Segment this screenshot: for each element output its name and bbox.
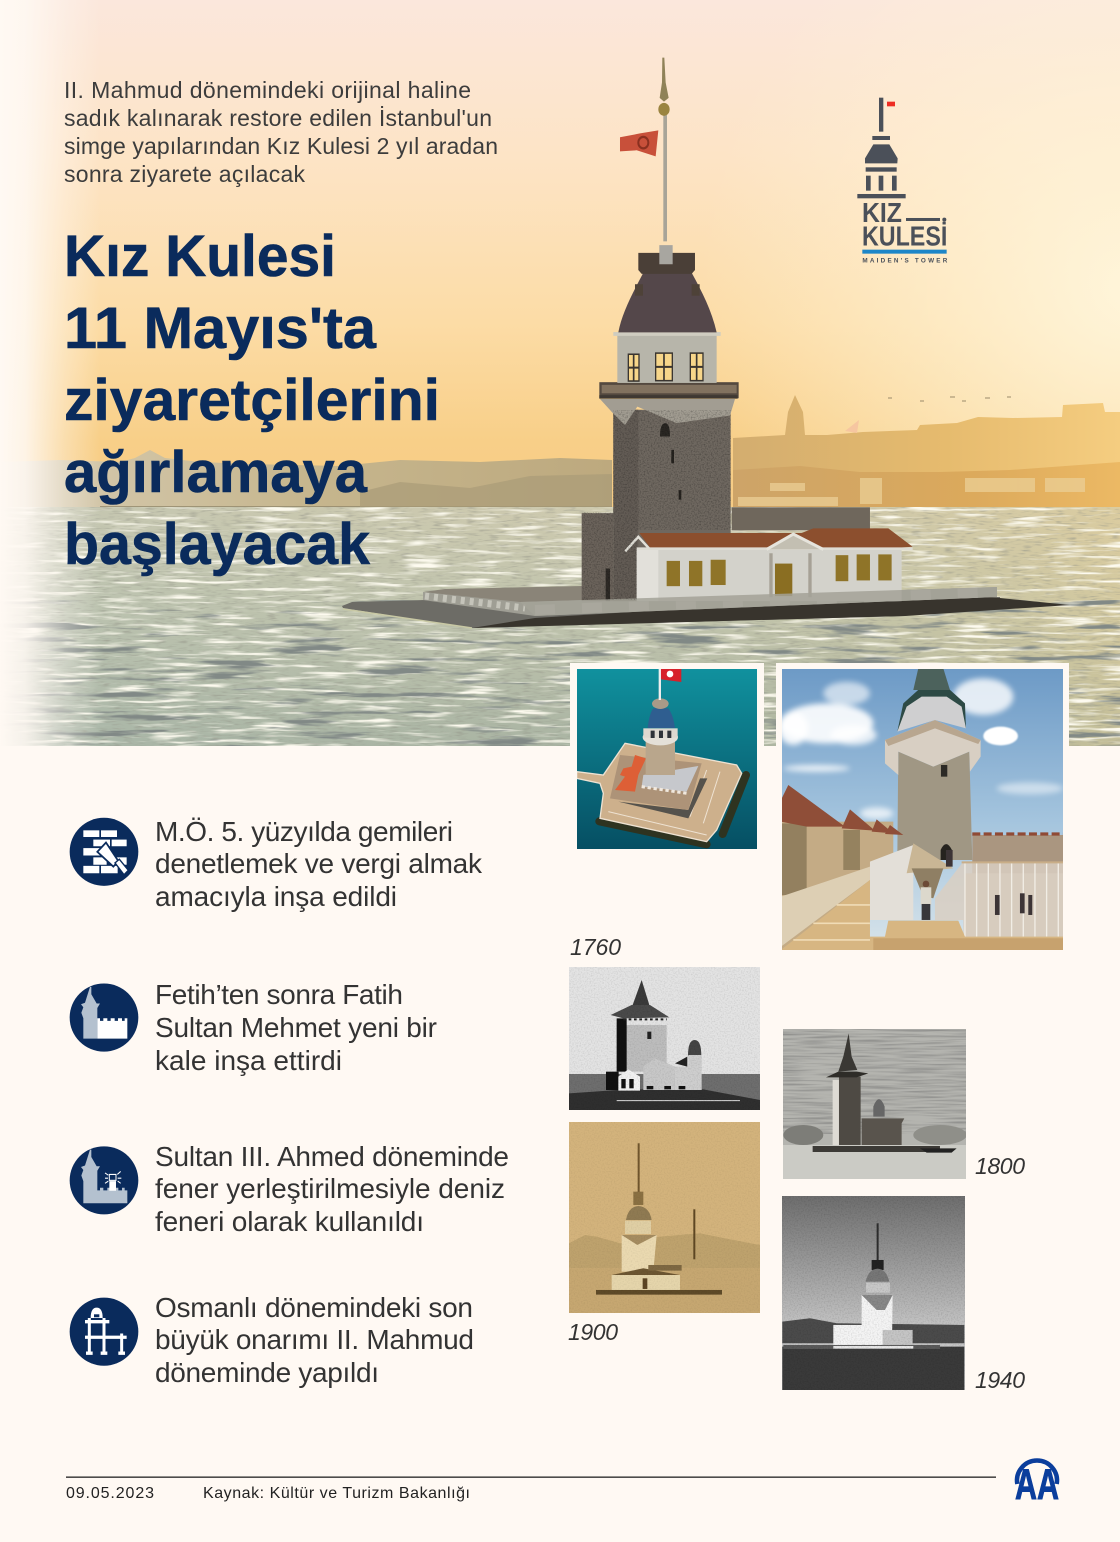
fact 3 text: feneri olarak kullanıldı bbox=[155, 1206, 424, 1237]
people in courtyard bbox=[946, 850, 1032, 915]
inner back wall bbox=[424, 586, 582, 602]
far shore right with Galata Tower bbox=[733, 395, 1120, 508]
raised perimeter bbox=[423, 587, 997, 616]
photo 1800 engraving bbox=[783, 1029, 967, 1180]
island deck bbox=[577, 743, 742, 842]
year labels: 1760 bbox=[570, 934, 621, 960]
title: Kız Kulesi bbox=[64, 224, 336, 289]
sea and ground bbox=[569, 1074, 760, 1111]
logo: Anadolu Agency: AA bbox=[1015, 1461, 1059, 1509]
fact 4 text: büyük onarımı II. Mahmud bbox=[155, 1324, 474, 1355]
shore and sea bbox=[783, 1125, 967, 1180]
logo tower mark bbox=[857, 98, 906, 198]
visitor bbox=[921, 881, 931, 920]
low building bbox=[625, 534, 913, 601]
flag bbox=[661, 668, 681, 682]
intro text bbox=[64, 77, 498, 187]
logo wordmark: MAIDEN'S TOWER bbox=[862, 258, 948, 265]
dome bbox=[618, 273, 717, 332]
logo: Kız Kulesi Maiden's Tower bbox=[857, 98, 948, 265]
logo wordmark: KIZ bbox=[862, 197, 902, 228]
title bbox=[64, 224, 440, 577]
front perimeter blocks over building base bbox=[520, 587, 997, 616]
low wings bbox=[606, 1040, 702, 1091]
photo: aerial view of the island bbox=[577, 668, 757, 849]
gallery and pole bbox=[635, 58, 700, 296]
water bbox=[569, 1268, 761, 1314]
fact 1 bbox=[70, 816, 483, 912]
fact 3 text bbox=[155, 1141, 509, 1237]
tower bbox=[826, 1033, 868, 1145]
sea bbox=[0, 507, 1120, 747]
photo: rendering of the restored tower terrace bbox=[778, 668, 1064, 951]
photo 1940 black and white bbox=[782, 1196, 965, 1392]
footer bbox=[66, 1461, 1059, 1509]
intro text: sonra ziyarete açılacak bbox=[64, 161, 306, 187]
intro text: sadık kalınarak restore edilen İstanbul'un bbox=[64, 105, 492, 131]
balcony bbox=[599, 382, 739, 399]
fact 3 text: Sultan III. Ahmed döneminde bbox=[155, 1141, 509, 1172]
fact 2 bbox=[70, 979, 437, 1076]
fact 1 text: M.Ö. 5. yüzyılda gemileri bbox=[155, 816, 453, 847]
title: 11 Mayıs'ta bbox=[64, 296, 377, 361]
icon: tower and fortress wall bbox=[70, 984, 138, 1052]
title: ziyaretçilerini bbox=[64, 368, 440, 433]
stair and railing bbox=[870, 843, 1063, 937]
fort wall and island bbox=[783, 1325, 940, 1349]
title: başlayacak bbox=[64, 512, 371, 577]
old tower bbox=[611, 980, 669, 1072]
far hill bbox=[782, 1318, 964, 1343]
icon: tower with lighthouse lamp bbox=[70, 1146, 138, 1214]
fact 4 text bbox=[155, 1292, 474, 1388]
fact 4 text: döneminde yapıldı bbox=[155, 1357, 379, 1388]
fact 2 text: kale inşa ettirdi bbox=[155, 1045, 342, 1076]
deck tiles bbox=[608, 770, 720, 835]
logo wordmark bbox=[862, 197, 948, 265]
red roofs bbox=[615, 755, 646, 792]
tower bbox=[862, 1223, 893, 1347]
Turkish flag bbox=[620, 130, 658, 156]
stone texture bbox=[580, 405, 735, 605]
photo 1760 engraving bbox=[569, 967, 760, 1111]
fact 2 text bbox=[155, 979, 437, 1076]
tiled roofs bbox=[781, 785, 903, 835]
tower and island base bbox=[342, 586, 1070, 628]
hero photo: Maiden's Tower at sunset bbox=[0, 0, 1120, 747]
rear wall and stone tower bbox=[582, 410, 870, 601]
far wall and courtyard bbox=[972, 835, 1064, 950]
shadow bbox=[618, 778, 707, 818]
lower building bbox=[813, 1099, 957, 1153]
clouds bbox=[778, 678, 1063, 819]
fact 2 text: Sultan Mehmet yeni bir bbox=[155, 1012, 437, 1043]
tower bbox=[646, 742, 675, 775]
fact 3 bbox=[70, 1141, 509, 1237]
fact 1 text bbox=[155, 816, 483, 912]
fact 1 text: denetlemek ve vergi almak bbox=[155, 848, 483, 879]
intro text: simge yapılarından Kız Kulesi 2 yıl aradan bbox=[64, 133, 498, 159]
fact 4 bbox=[70, 1292, 474, 1388]
sea bbox=[782, 1347, 964, 1392]
left fade bbox=[0, 0, 100, 746]
year labels: 1940 bbox=[975, 1367, 1025, 1393]
title: ağırlamaya bbox=[64, 440, 368, 505]
slab front edge bbox=[343, 609, 472, 628]
wooden deck bbox=[781, 880, 1064, 951]
corbel bbox=[600, 399, 735, 425]
breakwater rocks bbox=[599, 775, 746, 844]
photo frames bbox=[570, 663, 1069, 955]
tower bbox=[897, 752, 972, 860]
year labels: 1800 bbox=[975, 1153, 1025, 1179]
fact 3 text: fener yerleştirilmesiyle deniz bbox=[155, 1173, 505, 1204]
sky bbox=[0, 0, 1120, 520]
lantern drum with windows bbox=[613, 332, 721, 383]
distant city bbox=[569, 1233, 760, 1268]
logo wordmark: KULESİ bbox=[862, 221, 947, 252]
tower and building bbox=[582, 58, 913, 601]
icon: tower under scaffolding bbox=[70, 1298, 138, 1366]
inner fort bbox=[610, 755, 702, 810]
year labels: 1900 bbox=[568, 1319, 618, 1345]
island tower bbox=[622, 1143, 657, 1272]
fact 4 text: Osmanlı dönemindeki son bbox=[155, 1292, 473, 1323]
intro text: II. Mahmud dönemindeki orijinal haline bbox=[64, 77, 471, 103]
fact 1 text: amacıyla inşa edildi bbox=[155, 881, 397, 912]
island slab bbox=[342, 597, 1000, 628]
year labels bbox=[568, 934, 1025, 1393]
low building and mast bbox=[596, 1209, 722, 1295]
date: 09.05.2023 bbox=[66, 1485, 154, 1502]
photo 1900 sepia bbox=[569, 1122, 761, 1314]
source: Kaynak: Kültür ve Turizm Bakanlığı bbox=[203, 1485, 470, 1502]
icon: bricks and trowel bbox=[70, 818, 138, 886]
far shore left bbox=[30, 450, 612, 507]
fact 2 text: Fetih’ten sonra Fatih bbox=[155, 979, 403, 1010]
roof bbox=[639, 528, 913, 548]
left stone wall bbox=[781, 822, 893, 950]
